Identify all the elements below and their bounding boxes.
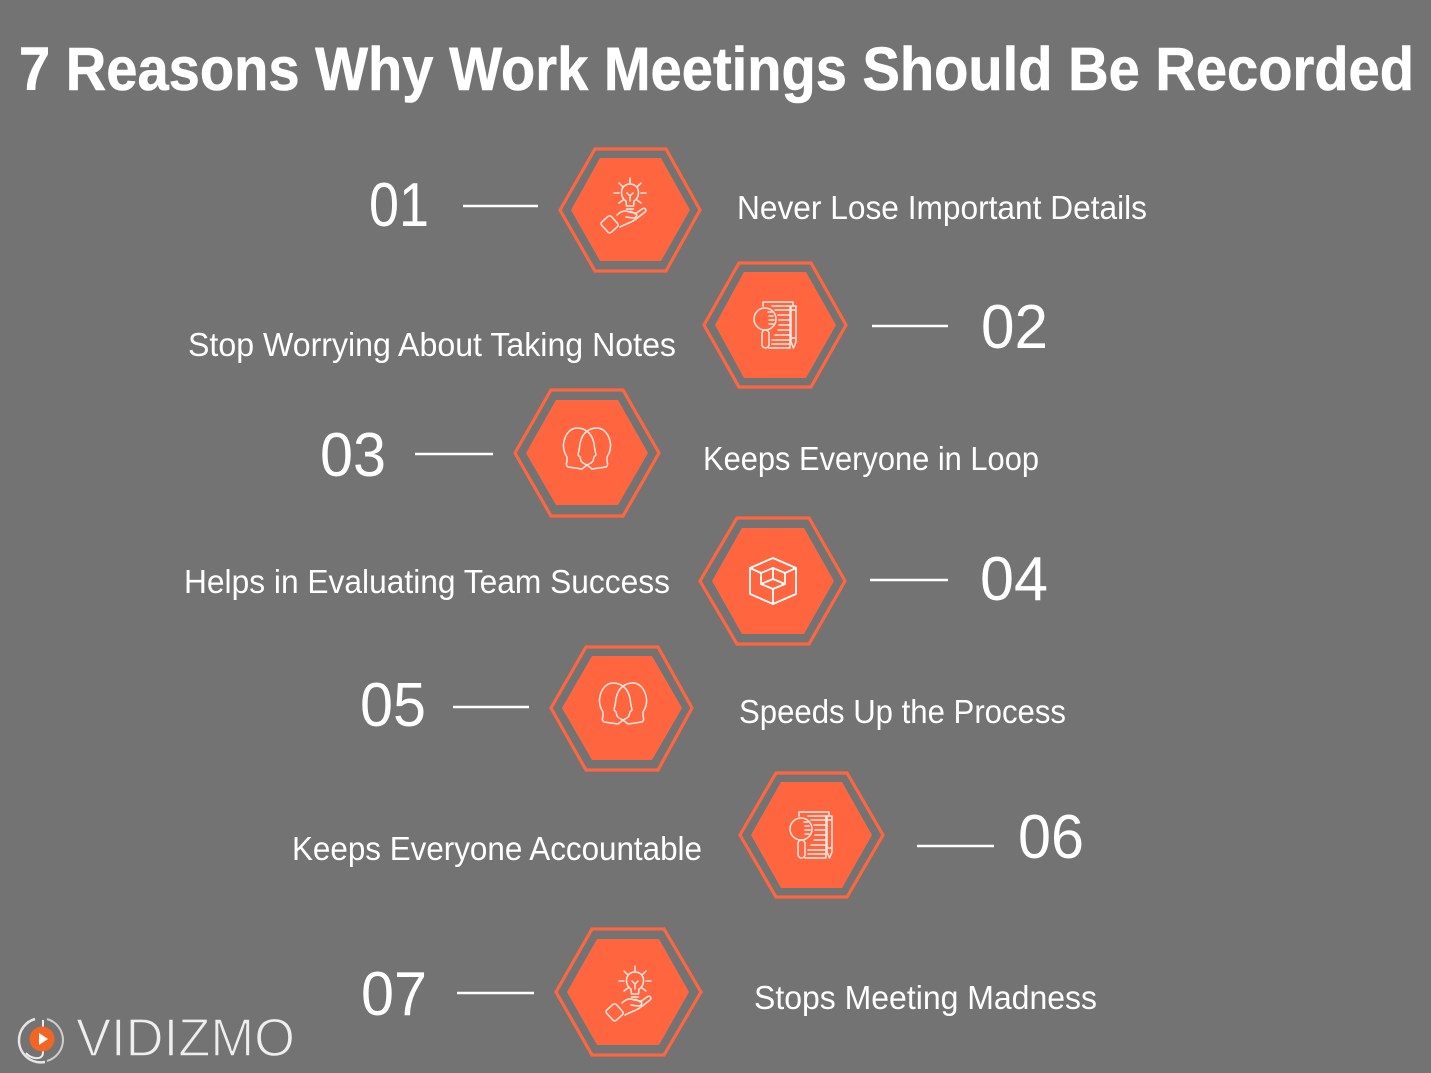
number 03: 03 <box>320 421 386 490</box>
item 02: Stop Worrying About Taking Notes <box>188 263 1048 387</box>
item 07: Stops Meeting Madness <box>361 929 1097 1055</box>
connector line 04 <box>870 579 948 581</box>
label 01: Never Lose Important Details <box>737 189 1147 226</box>
number 07: 07 <box>361 960 427 1029</box>
item 06: Keeps Everyone Accountable <box>292 773 1084 897</box>
connector line 05 <box>453 706 529 708</box>
icon: light bulb over hand <box>600 178 646 234</box>
connector line 01 <box>463 205 538 207</box>
label 04: Helps in Evaluating Team Success <box>184 563 670 600</box>
logo: VIDIZMO <box>19 1008 295 1068</box>
number 02: 02 <box>981 293 1048 362</box>
number 06: 06 <box>1018 803 1084 872</box>
label 06: Keeps Everyone Accountable <box>292 830 702 867</box>
item 03: Keeps Everyone in Loop <box>320 390 1039 516</box>
hexagon 04 <box>700 518 845 644</box>
hexagon 05 <box>551 647 692 770</box>
item 01: Never Lose Important Details <box>369 149 1147 271</box>
label 05: Speeds Up the Process <box>739 693 1066 730</box>
icon: two overlapping heads <box>599 683 647 724</box>
icon: notes with magnifier <box>754 302 796 348</box>
connector line 02 <box>872 325 948 327</box>
icon: cube <box>750 558 796 604</box>
connector line 06 <box>917 845 994 847</box>
label 03: Keeps Everyone in Loop <box>703 440 1039 477</box>
label 02: Stop Worrying About Taking Notes <box>188 326 676 363</box>
number 05: 05 <box>360 671 426 740</box>
hexagon 07 <box>556 929 701 1055</box>
number 01: 01 <box>369 171 429 240</box>
hexagon 03 <box>515 390 659 516</box>
hexagon 02 <box>704 263 846 387</box>
icon: two overlapping heads <box>563 428 611 469</box>
connector line 07 <box>457 992 534 994</box>
logo mark <box>19 1019 63 1062</box>
icon: light bulb over hand <box>605 966 651 1022</box>
hexagon 01 <box>560 149 700 271</box>
item 05: Speeds Up the Process <box>360 647 1066 770</box>
item 04: Helps in Evaluating Team Success <box>184 518 1048 644</box>
logo wordmark: VIDIZMO <box>76 1008 295 1068</box>
connector line 03 <box>415 453 493 455</box>
number 04: 04 <box>980 545 1048 614</box>
label 07: Stops Meeting Madness <box>754 979 1097 1016</box>
icon: notes with magnifier <box>790 812 832 858</box>
hexagon 06 <box>740 773 883 897</box>
